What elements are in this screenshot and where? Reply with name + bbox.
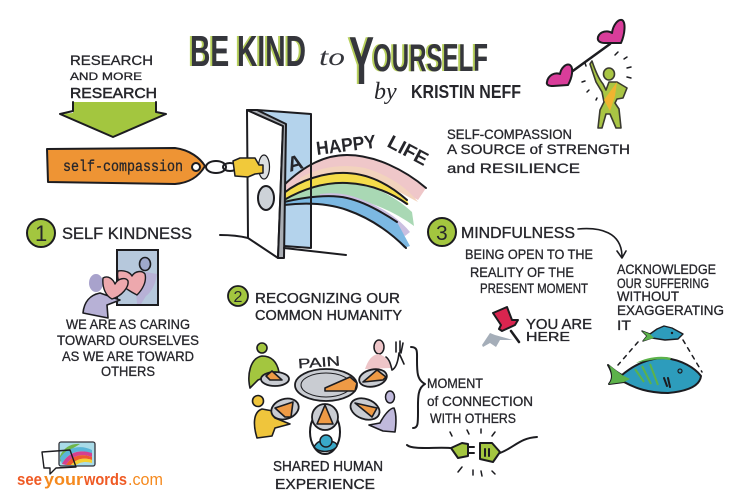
section 1 badge: 1 xyxy=(35,221,47,246)
logo: see your words xyxy=(17,442,163,489)
text: source of strength: SELF-COMPASSION xyxy=(447,127,572,142)
text: shared human experience: EXPERIENCE xyxy=(275,476,375,493)
text: mindfulness description xyxy=(465,247,593,296)
icon: person hugging heart in mirror xyxy=(83,250,158,318)
icon: small fish xyxy=(642,326,683,341)
title: Y xyxy=(349,23,374,99)
text: shared human experience xyxy=(273,458,383,493)
text: mindfulness description: BEING OPEN TO THE xyxy=(465,247,593,262)
section 2 heading: COMMON HUMANITY xyxy=(255,307,402,324)
person top left xyxy=(249,343,289,388)
person bottom xyxy=(310,404,340,454)
open doorway xyxy=(257,110,311,248)
central plate with pie xyxy=(295,369,357,401)
research heading xyxy=(70,53,157,102)
reflection xyxy=(136,272,157,304)
section 2 heading xyxy=(255,290,402,324)
text: self kindness description xyxy=(57,317,199,379)
text: source of strength: A SOURCE of STRENGTH xyxy=(447,142,630,157)
author byline xyxy=(374,79,521,105)
key tag: self-compassion: self-compassion xyxy=(63,158,183,176)
text: moment of connection xyxy=(427,376,533,426)
happy life label: LIFE xyxy=(384,132,431,171)
author byline: KRISTIN NEFF xyxy=(411,82,521,102)
logo picture xyxy=(59,442,95,466)
brace xyxy=(411,347,425,428)
logo rainbow xyxy=(60,444,92,465)
doorway frame xyxy=(257,110,311,248)
shared pie table scene xyxy=(249,340,404,454)
research heading: RESEARCH xyxy=(70,53,153,68)
text: shared human experience: SHARED HUMAN xyxy=(273,458,383,475)
text: self kindness description: OTHERS xyxy=(101,364,155,379)
text: moment of connection: of CONNECTION xyxy=(427,394,533,409)
pain label: PAIN xyxy=(298,353,341,371)
barbell bar xyxy=(570,44,610,73)
logo wordmark: see xyxy=(17,470,42,489)
section 1 heading: SELF KINDNESS xyxy=(62,224,192,243)
person right xyxy=(347,391,396,432)
text: acknowledge suffering: OUR SUFFERING xyxy=(617,276,709,291)
text: you are here xyxy=(526,316,592,344)
curved arrow xyxy=(578,229,626,258)
dashed scale lines xyxy=(618,340,702,372)
person xyxy=(83,293,120,318)
mirror xyxy=(117,250,158,305)
text: self kindness description: TOWARD OURSELVES xyxy=(57,333,199,348)
research heading: RESEARCH xyxy=(70,85,157,102)
research heading: AND MORE xyxy=(70,71,142,83)
text: you are here: YOU ARE xyxy=(526,316,592,333)
person left xyxy=(252,395,301,438)
section 2 heading: RECOGNIZING OUR xyxy=(255,290,400,307)
title: to xyxy=(319,44,345,71)
icon: figure lifting hearts xyxy=(547,20,631,128)
text: acknowledge suffering: WITHOUT xyxy=(617,289,679,304)
author byline: by xyxy=(374,79,397,105)
reflected heart xyxy=(118,271,145,295)
heart xyxy=(103,277,128,299)
key tag: self-compassion xyxy=(47,148,237,184)
door knob xyxy=(258,186,274,210)
text: moment of connection: MOMENT xyxy=(427,376,483,391)
sash xyxy=(604,82,617,111)
text: acknowledge suffering xyxy=(617,262,724,333)
text: self kindness description: AS WE ARE TOWARD xyxy=(62,349,194,364)
title: BE KIND xyxy=(190,27,306,76)
arrow outline xyxy=(60,102,166,137)
icon: yellow key xyxy=(233,158,263,177)
door edge xyxy=(247,110,286,258)
text: acknowledge suffering: IT xyxy=(617,318,631,333)
icon: plug and socket xyxy=(407,429,537,476)
figure body xyxy=(590,61,627,128)
top heart xyxy=(598,20,625,43)
text: you are here: HERE xyxy=(526,329,570,344)
happy life label: A xyxy=(285,151,306,177)
text: mindfulness description: REALITY OF THE xyxy=(470,265,574,280)
person top right xyxy=(358,340,404,389)
logo wordmark: words xyxy=(83,470,127,489)
logo wordmark: .com xyxy=(128,470,163,489)
figure head xyxy=(604,68,614,80)
icon: green down arrow xyxy=(60,102,166,137)
text: self kindness description: WE ARE AS CARING xyxy=(66,317,190,332)
logo speech bubble xyxy=(42,450,76,474)
section 2 badge: 2 xyxy=(234,289,242,306)
text: acknowledge suffering: EXAGGERATING xyxy=(617,303,724,318)
text: moment of connection: WITH OTHERS xyxy=(430,411,516,426)
text: source of strength xyxy=(447,127,630,176)
text: mindfulness description: PRESENT MOMENT xyxy=(480,281,588,296)
energy ticks xyxy=(582,52,631,100)
rainbow xyxy=(284,155,426,248)
lower heart xyxy=(547,65,572,86)
title: OURSELF xyxy=(373,37,488,80)
text: acknowledge suffering: ACKNOWLEDGE xyxy=(617,262,716,277)
lock plate xyxy=(258,155,270,179)
happy life label: HAPPY xyxy=(315,132,377,160)
section 1 badge xyxy=(27,219,55,247)
icon: red push pin xyxy=(482,307,519,347)
section 3 badge xyxy=(428,218,456,246)
text: source of strength: and RESILIENCE xyxy=(447,161,580,176)
icon: big fish xyxy=(608,357,701,393)
section 3 badge: 3 xyxy=(436,222,448,245)
title xyxy=(190,23,488,99)
door and rainbow xyxy=(220,110,431,258)
happy life label xyxy=(285,132,431,177)
section 2 badge xyxy=(228,286,248,306)
door panel xyxy=(247,110,283,258)
logo wordmark: your xyxy=(44,470,83,489)
floor lines xyxy=(220,235,346,255)
section 3 heading: MINDFULNESS xyxy=(461,225,575,242)
